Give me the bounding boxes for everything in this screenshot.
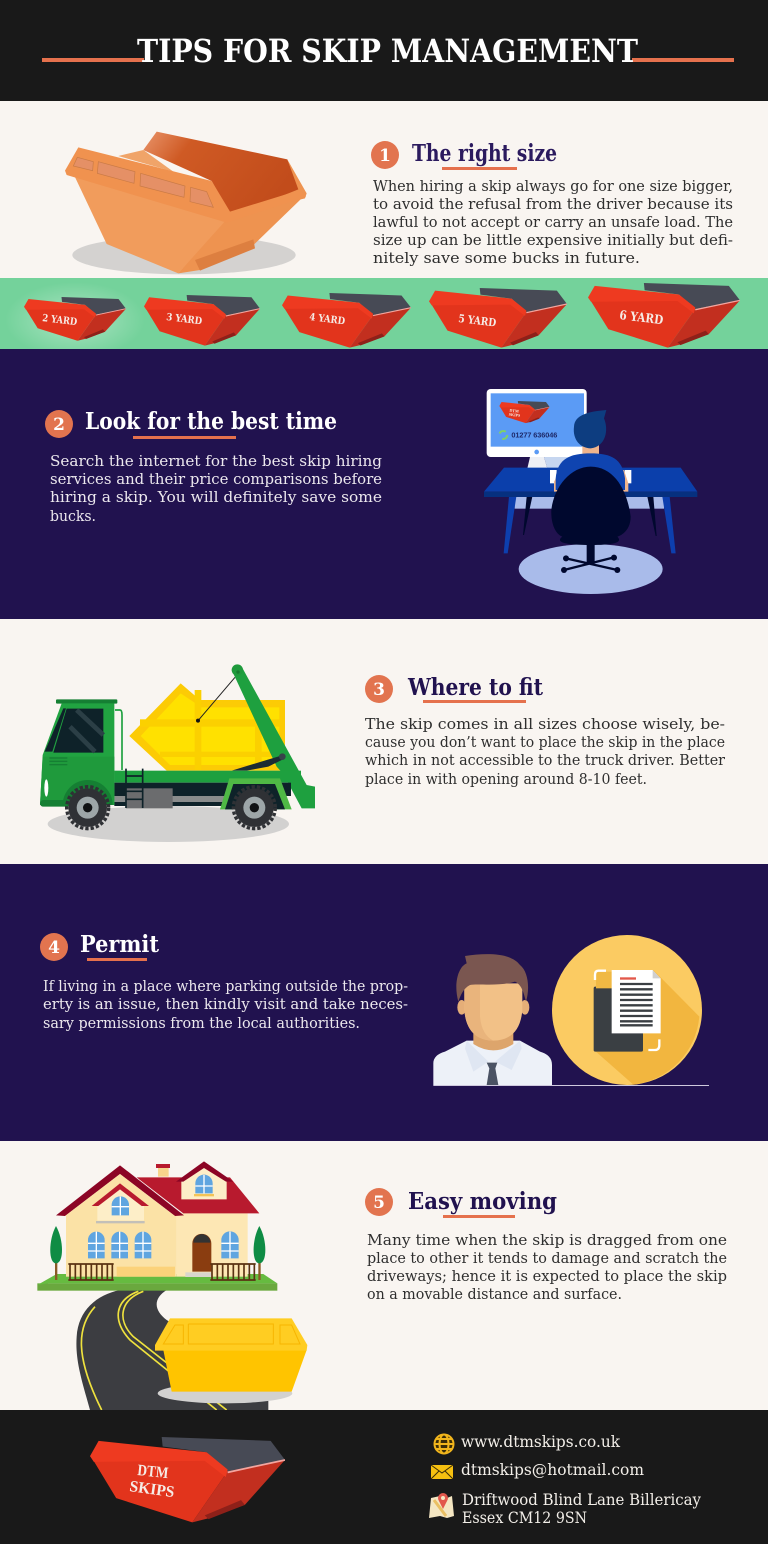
icon: 5 yard skip [429,288,567,348]
heading: tip 1 [371,140,557,170]
heading: tip 5: 5 [373,1193,385,1213]
heading: tip 5 [365,1188,557,1218]
icon: 3 yard skip [144,295,260,346]
icon: DTM skips logo skip: DTM [137,1462,169,1482]
icon: rear wheel [233,787,275,829]
text: email: dtmskips@hotmail.com [461,1460,644,1479]
text block: tip 1: When hiring a skip always go for one size bigger, [373,177,733,195]
text block: tip 2: services and their price comparisons before [50,470,382,488]
text block: tip 4: erty is an issue, then kindly visit and take neces- [43,995,408,1013]
text block: tip 3: which in not accessible to the truck driver. Better [365,751,726,769]
text block: tip 1 [373,177,733,267]
text block: tip 5 [367,1231,727,1303]
text block: tip 2: Search the internet for the best skip hiring [50,452,382,470]
text block: tip 3: cause you don’t want to place the skip in the place [365,733,725,751]
text block: tip 5: on a movable distance and surface. [367,1285,622,1303]
icon: person at computer [484,389,697,594]
icon: DTM skips logo skip [90,1437,285,1522]
panel: tip 2 background [0,349,768,619]
panel: tip 1 background [0,101,768,278]
icon: person at computer: DTM [509,408,519,414]
text block: tip 3: The skip comes in all sizes choose wisely, be- [365,715,725,733]
heading: tip 4: 4 [48,938,60,958]
icon: 4 yard skip: 4 YARD [309,312,346,327]
heading: tip 5: Easy moving [408,1188,557,1215]
heading: tip 4: Permit [80,931,159,958]
icon: man with permit document [433,935,709,1086]
text block: tip 5: place to other it tends to damage and scratch the [367,1249,727,1267]
icon: 6 yard skip: 6 YARD [619,307,664,327]
icon: DTM skips logo skip: SKIPS [128,1478,175,1501]
icon: 2 yard skip: 2 YARD [42,313,78,328]
text block: tip 1: nitely save some bucks in future. [373,249,640,267]
heading: tip 3: Where to fit [407,674,543,701]
panel: tip 3 background [0,619,768,864]
text: address: Essex CM12 9SN [462,1508,587,1527]
text: address: Driftwood Blind Lane Billericay [462,1490,701,1509]
panel: tip 5 background [0,1141,768,1410]
heading: tip 1: The right size [412,140,557,167]
icon: 6 yard skip [588,283,740,348]
heading: tip 2: Look for the best time [85,408,337,435]
icon: person at computer: 01277 636046 [511,431,557,440]
text block: tip 5: Many time when the skip is dragged from one [367,1231,727,1249]
heading: tip 2: 2 [53,415,65,435]
heading: tip 4 [40,931,159,961]
heading: tip 3: 3 [373,680,385,700]
text block: tip 1: size up can be little expensive initially but defi- [373,231,733,249]
text block: tip 3: place in with opening around 8-10 feet. [365,770,647,788]
heading: tip 3 [365,674,543,703]
text block: tip 4: If living in a place where parking outside the prop- [43,977,408,995]
icon: 3 yard skip: 3 YARD [166,312,203,327]
header band [0,0,768,101]
icon: house with road and yellow skip [37,1161,307,1410]
text block: tip 5: driveways; hence it is expected to place the skip [367,1267,727,1285]
text block: tip 2: hiring a skip. You will definitely save some [50,488,382,506]
icon: globe [434,1434,454,1454]
panel: tip 4 background [0,864,768,1141]
icon: 4 yard skip [282,293,411,348]
text block: tip 2 [50,452,382,525]
text: website: www.dtmskips.co.uk [461,1432,620,1451]
heading: tip 2 [45,408,337,439]
text: address [462,1490,701,1527]
text block: tip 4 [43,977,408,1032]
text block: tip 3 [365,715,726,788]
panel: footer background [0,1410,768,1544]
icon: envelope [431,1465,453,1479]
icon: green skip truck [40,664,315,842]
heading: tip 1: 1 [379,146,391,166]
icon: person at computer: SKIPS [509,412,521,418]
text block: tip 1: lawful to not accept or carry an unsafe load. The [373,213,733,231]
text block: tip 2: bucks. [50,507,96,525]
icon: map pin [429,1493,454,1518]
icon: orange skip [65,132,307,274]
icon: 5 yard skip: 5 YARD [458,312,497,330]
title: TIPS FOR SKIP MANAGEMENT [137,32,638,70]
icon: 2 yard skip [24,297,126,341]
text block: tip 1: to avoid the refusal from the driver because its [373,195,733,213]
text block: tip 4: sary permissions from the local authorities. [43,1014,360,1032]
icon: front wheel [67,787,109,829]
panel: skip sizes strip [0,278,768,358]
